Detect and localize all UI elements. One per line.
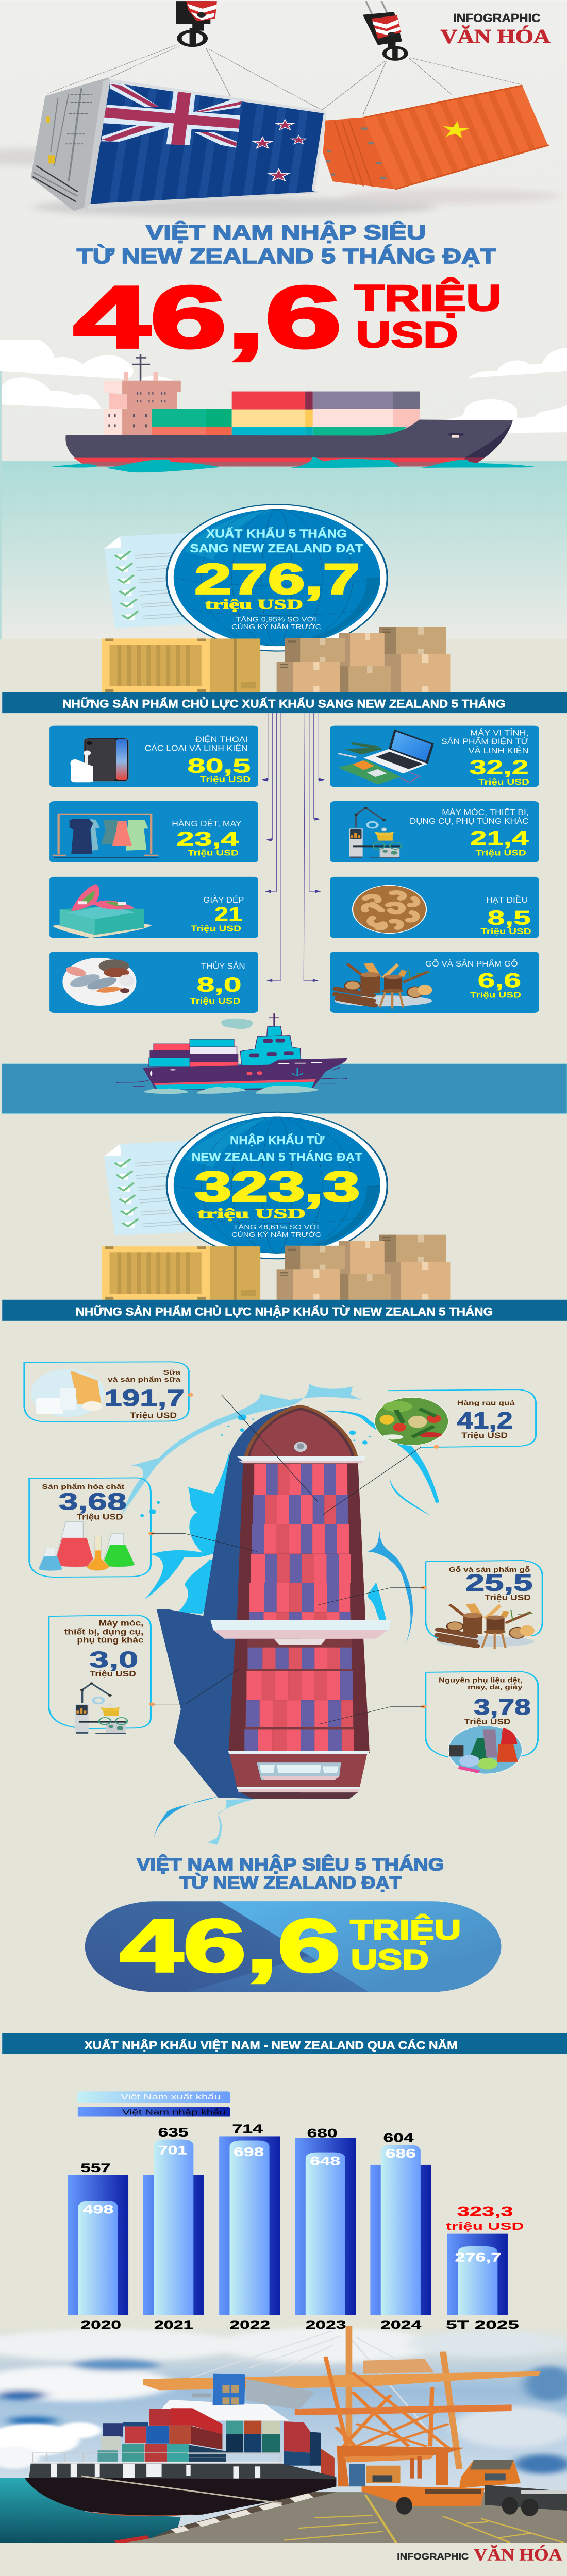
crane hook: right: [363, 1, 406, 60]
deck: [31, 2462, 282, 2464]
icon: flasks: [39, 1522, 135, 1571]
ship: container vessel: [65, 354, 513, 467]
bars 2023: [295, 2127, 356, 2331]
bars 2024: [370, 2131, 431, 2331]
callout: vegetables: Triệu USD: [461, 1431, 508, 1440]
trucks: [349, 2460, 567, 2516]
banner: import products: [2, 1300, 567, 1321]
card: seafood: THỦY SẢN: [201, 962, 245, 971]
export globe text: SANG NEW ZEALAND ĐẠT: [190, 541, 363, 555]
icon: milk and cheese: [31, 1369, 105, 1417]
superstructure: [150, 2400, 289, 2421]
card: computers: [330, 726, 539, 787]
card: footwear: Triệu USD: [191, 924, 241, 933]
headline figure: USD: [356, 315, 458, 355]
title: [77, 221, 496, 268]
callout: vegetables: Hàng rau quả: [457, 1399, 515, 1406]
card: cashew: 8,5: [488, 907, 531, 929]
callout: machinery: Máy móc,: [99, 1619, 144, 1628]
banner: export products: [2, 692, 567, 713]
cargo container and boxes: [102, 627, 450, 692]
bars 2023: 2023: [306, 2318, 346, 2331]
bars 2021: 2021: [154, 2318, 193, 2331]
bars 2021: 701: [158, 2143, 187, 2157]
card: garments: [49, 801, 258, 862]
card: computers: Triệu USD: [478, 777, 529, 787]
bars 5 months 2025: 276,7: [455, 2251, 501, 2264]
card: machinery: MÁY MÓC, THIẾT BỊ,: [442, 808, 529, 817]
ship: top view: [157, 1405, 391, 1799]
icon: robot arm: [349, 807, 402, 858]
icon: logs: [437, 1603, 535, 1649]
callout: dairy: Triệu USD: [130, 1411, 177, 1420]
bars 2023: 680: [307, 2127, 338, 2140]
export globe text: triệu USD: [205, 597, 303, 612]
logo: footer: INFOGRAPHIC: [397, 2552, 469, 2562]
stacked containers: [97, 2408, 335, 2477]
callout: machinery: [49, 1615, 239, 1734]
callout: textile materials: Nguyên phụ liệu dệt,: [439, 1676, 523, 1684]
logo: footer: [397, 2545, 562, 2564]
icon: robot arm: [75, 1682, 127, 1734]
card: machinery: 21,4: [470, 827, 529, 850]
callout: textile materials: 3,78: [474, 1694, 531, 1720]
headline figure: TRIỆU: [354, 277, 502, 318]
callout: machinery: thiết bị, dụng cụ,: [64, 1628, 144, 1636]
card: computers: VÀ LINH KIỆN: [468, 747, 529, 755]
callout: wood: 25,5: [465, 1570, 532, 1596]
icon: shoes on a box: [53, 884, 152, 938]
bars 2020: 498: [83, 2202, 113, 2216]
callout: chemicals: Sản phẩm hóa chất: [42, 1483, 125, 1490]
bars 2022: 698: [234, 2145, 264, 2159]
logo: [440, 12, 551, 47]
clouds: [0, 340, 567, 433]
globe: import total: [104, 1112, 387, 1259]
callout: dairy: Sữa: [163, 1368, 180, 1376]
icon: seafood plate: [62, 958, 136, 1006]
callout: wood: Triệu USD: [485, 1594, 531, 1602]
callout: machinery: Triệu USD: [90, 1670, 136, 1679]
card: wood: 6,6: [478, 970, 521, 992]
bars 2024: 2024: [380, 2318, 422, 2331]
card: cashew: [330, 877, 539, 938]
hull: [25, 2478, 336, 2516]
heading: trade deficit: TỪ NEW ZEALAND ĐẠT: [180, 1873, 402, 1892]
card: phones: ĐIỆN THOẠI: [195, 735, 248, 744]
export globe text: CÙNG KỲ NĂM TRƯỚC: [231, 623, 321, 631]
banner: yearly trade: [2, 2033, 567, 2054]
crane hook: left: [176, 1, 217, 46]
export globe text: XUẤT KHẨU 5 THÁNG: [206, 527, 347, 540]
card: phones: CÁC LOẠI VÀ LINH KIỆN: [145, 744, 248, 753]
icon: laptop and circuit board: [338, 729, 434, 784]
callout: machinery: phụ tùng khác: [77, 1636, 144, 1645]
bars 2022: 714: [232, 2122, 263, 2136]
import globe text: [192, 1133, 362, 1239]
bars 5 months 2025: 323,3: [457, 2204, 513, 2219]
card: wood: [330, 952, 539, 1013]
photo: container port: [0, 2325, 567, 2543]
card: seafood: 8,0: [197, 974, 242, 996]
export globe text: TĂNG 0,95% SO VỚI: [236, 616, 316, 623]
callout: chemicals: Triệu USD: [77, 1513, 123, 1521]
callout: dairy: [24, 1362, 318, 1501]
cargo container and boxes: [102, 1235, 450, 1300]
crane: [143, 2326, 541, 2486]
bars 2020: [68, 2161, 128, 2331]
callout: chemicals: 3,68: [59, 1489, 127, 1515]
import globe text: NEW ZEALAN 5 THÁNG ĐẠT: [192, 1150, 362, 1164]
card: phones: Triệu USD: [200, 775, 251, 784]
callout: textile materials: [318, 1671, 538, 1774]
bars 2022: [219, 2122, 280, 2331]
pill: trade deficit figure: 46,6: [120, 1904, 341, 1988]
icon: clothes rack: [53, 814, 158, 857]
pill: trade deficit figure: USD: [351, 1944, 429, 1975]
soft shadows under containers: [0, 148, 560, 217]
card: footwear: GIÀY DÉP: [203, 896, 244, 905]
import globe text: NHẬP KHẨU TỪ: [230, 1133, 325, 1147]
callout: vegetables: [323, 1389, 536, 1515]
card: seafood: Triệu USD: [190, 996, 241, 1006]
callout: machinery: 3,0: [89, 1647, 138, 1672]
card: computers: SẢN PHẨM ĐIỆN TỬ: [441, 737, 529, 746]
bars 5 months 2025: [446, 2204, 524, 2331]
callout: textile materials: may, da, giày: [468, 1683, 523, 1691]
bars 5 months 2025: 5T 2025: [446, 2318, 519, 2331]
callout: vegetables: 41,2: [457, 1408, 513, 1434]
bars 2024: 686: [386, 2147, 416, 2161]
card: garments: 23,4: [176, 828, 239, 850]
callout: dairy: và sản phẩm sữa: [108, 1376, 180, 1383]
card: computers: MÁY VI TÍNH,: [470, 728, 529, 737]
card: machinery: Triệu USD: [476, 848, 526, 857]
card: cashew: HẠT ĐIỀU: [486, 896, 528, 905]
card: wood: Triệu USD: [470, 990, 521, 999]
card: footwear: [49, 877, 258, 938]
export globe text: 276,7: [194, 555, 360, 603]
callout: wood: [318, 1561, 542, 1649]
container: New Zealand flag: [31, 77, 326, 211]
callout: wood: Gỗ và sản phẩm gỗ: [449, 1566, 530, 1573]
headline figure: [73, 268, 502, 366]
import globe text: TĂNG 48,61% SO VỚI: [233, 1223, 319, 1231]
connector lines: [262, 713, 325, 982]
legend: [77, 2091, 230, 2117]
export globe text: [190, 527, 363, 631]
bars 2021: 635: [158, 2126, 188, 2139]
splash below ship: [154, 1797, 256, 1845]
bars 2022: 2022: [229, 2318, 270, 2331]
icon: phone and earbuds: [71, 738, 128, 782]
card: garments: Triệu USD: [188, 848, 239, 857]
pill: trade deficit figure: TRIỆU: [350, 1913, 461, 1945]
icon: logs and stool: [335, 963, 432, 1008]
bars 2021: [143, 2126, 204, 2331]
import globe text: 323,3: [194, 1163, 360, 1211]
ship: cartoon cargo vessel: [116, 1013, 347, 1094]
heading: trade deficit: [137, 1855, 444, 1892]
headline figure: 46,6: [73, 268, 342, 366]
card: phones: 80,5: [187, 755, 251, 777]
card: computers: 32,2: [470, 756, 529, 778]
blue sea band: [2, 1064, 567, 1113]
chains: [47, 45, 522, 115]
callout: textile materials: Triệu USD: [464, 1718, 511, 1726]
card: garments: HÀNG DỆT, MAY: [172, 820, 242, 828]
bars 2020: 2020: [80, 2318, 121, 2331]
import globe text: triệu USD: [197, 1206, 306, 1222]
heading: trade deficit: VIỆT NAM NHẬP SIÊU 5 THÁNG: [137, 1855, 444, 1874]
bars 2020: 557: [80, 2161, 111, 2175]
dock: [115, 2492, 567, 2543]
icon: thread spools: [448, 1726, 522, 1774]
container: Vietnam flag: [323, 86, 549, 189]
card: footwear: 21: [214, 903, 242, 925]
icon: vegetables: [375, 1397, 448, 1445]
legend: Việt Nam xuất khẩu: [121, 2093, 221, 2102]
card: cashew: Triệu USD: [480, 926, 531, 936]
card: machinery: [330, 801, 539, 862]
globe: export total: [104, 504, 387, 651]
waves: [51, 456, 539, 472]
legend: Việt Nam nhập khẩu: [122, 2108, 226, 2116]
bars 5 months 2025: triệu USD: [446, 2221, 524, 2232]
sea: [0, 2478, 181, 2543]
card: phones: [49, 726, 258, 787]
title: VIỆT NAM NHẬP SIÊU: [146, 221, 426, 244]
card: wood: GỖ VÀ SẢN PHẨM GỖ: [425, 959, 518, 968]
icon: cashew bowl: [353, 885, 426, 933]
pill: trade deficit figure: [85, 1901, 503, 1992]
sea background: [0, 461, 567, 639]
chart: yearly trade: [68, 2091, 524, 2331]
union jack: [101, 82, 242, 148]
callout: chemicals: [29, 1478, 257, 1577]
card: seafood: [49, 952, 258, 1013]
import globe text: CÙNG KỲ NĂM TRƯỚC: [231, 1231, 321, 1239]
water splash around ship: [121, 1384, 439, 1645]
bars 2024: 604: [383, 2131, 414, 2145]
bars 2023: 648: [310, 2154, 340, 2168]
callout: dairy: 191,7: [104, 1385, 185, 1411]
